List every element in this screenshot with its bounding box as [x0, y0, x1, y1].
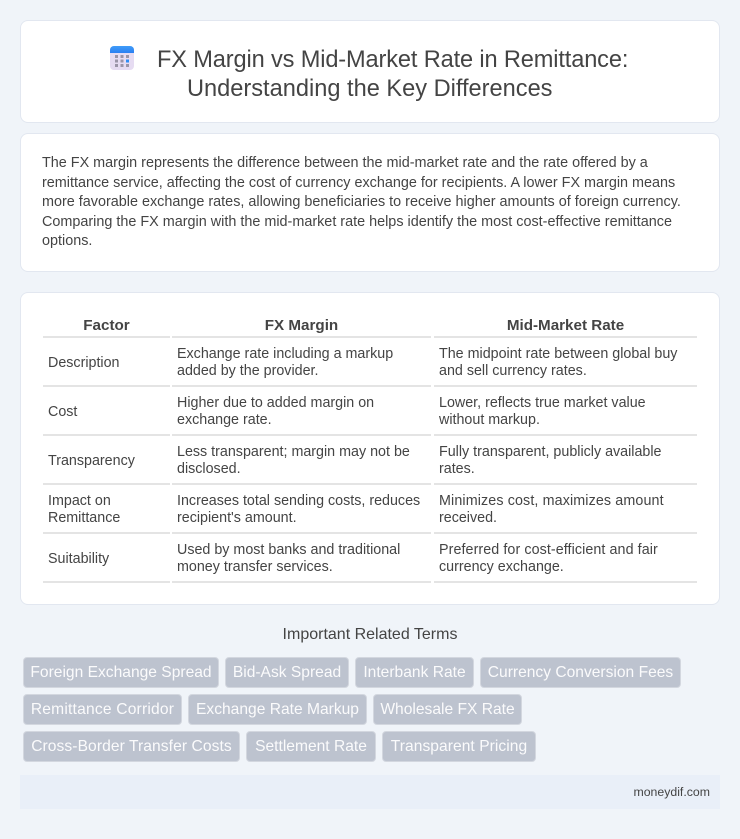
intro paragraph: options. [42, 233, 92, 249]
column headers [83, 317, 624, 334]
tag: Interbank Rate [363, 664, 466, 681]
row: impact on remittance: Impact on [48, 493, 111, 509]
tag: Bid-Ask Spread [233, 664, 341, 681]
row: description: Description [48, 355, 120, 371]
column headers: FX Margin [265, 317, 338, 334]
row: description: Exchange rate including a markup [177, 346, 393, 362]
tag [355, 657, 474, 688]
row: impact on remittance [48, 493, 664, 526]
title: FX Margin vs Mid-Market Rate in Remittance: [157, 47, 628, 73]
intro paragraph: remittance service, affecting the cost of currency exchange for recipients. A lower FX margin means [42, 174, 675, 190]
title: Understanding the Key Differences [187, 76, 552, 102]
panel: intro text [20, 133, 720, 272]
tag [373, 694, 522, 725]
tag [23, 694, 182, 725]
tag [480, 657, 681, 688]
column headers: Factor [83, 317, 130, 334]
row: impact on remittance: Remittance [48, 510, 120, 526]
row: cost: Cost [48, 404, 77, 420]
row: transparency: rates. [439, 460, 475, 476]
icon: calendar [110, 46, 134, 70]
intro paragraph: Comparing the FX margin with the mid-market rate helps identify the most cost-effective remittance [42, 214, 672, 230]
tag: Remittance Corridor [31, 701, 174, 718]
row: cost [48, 395, 646, 428]
tag: Exchange Rate Markup [196, 701, 359, 718]
row: suitability: currency exchange. [439, 558, 564, 574]
row: transparency: Less transparent; margin may not be [177, 444, 410, 460]
row: transparency: disclosed. [177, 460, 241, 476]
row: suitability: money transfer services. [177, 558, 333, 574]
row: suitability: Suitability [48, 551, 109, 567]
tag [23, 731, 240, 762]
tag: Foreign Exchange Spread [30, 664, 212, 681]
row: transparency: Fully transparent, publicly available [439, 444, 662, 460]
footer bar [20, 775, 720, 809]
row: cost: Lower, reflects true market value [439, 395, 646, 411]
tag [382, 731, 536, 762]
intro paragraph: The FX margin represents the difference between the mid-market rate and the rate offered by a [42, 155, 648, 171]
row: impact on remittance: recipient's amount. [177, 510, 297, 526]
row: cost: exchange rate. [177, 412, 272, 428]
tag: Wholesale FX Rate [380, 701, 515, 718]
row: description: added by the provider. [177, 362, 318, 378]
panel: comparison table [20, 292, 720, 605]
row: cost: Higher due to added margin on [177, 395, 374, 411]
row: impact on remittance: Minimizes cost, maximizes amount [439, 493, 664, 509]
row: transparency [48, 444, 662, 476]
tag: Cross-Border Transfer Costs [31, 738, 232, 755]
intro paragraph: more favorable exchange rates, allowing beneficiaries to receive higher amounts of foreign currency. [42, 194, 681, 210]
tag [188, 694, 367, 725]
row: transparency: Transparency [48, 453, 135, 469]
intro paragraph [42, 155, 681, 249]
row: suitability: Preferred for cost-efficient and fair [439, 542, 658, 558]
tag [225, 657, 349, 688]
row: impact on remittance: received. [439, 510, 497, 526]
row: suitability: Used by most banks and traditional [177, 542, 400, 558]
tag: Settlement Rate [255, 738, 367, 755]
row: description: The midpoint rate between global buy [439, 346, 677, 362]
tag [246, 731, 376, 762]
row: description [48, 346, 678, 378]
column headers: Mid-Market Rate [507, 317, 624, 334]
tag [23, 657, 219, 688]
footer source: moneydif.com [633, 785, 710, 799]
comparison table [43, 317, 697, 583]
tag: Transparent Pricing [391, 738, 527, 755]
row: impact on remittance: Increases total sending costs, reduces [177, 493, 420, 509]
panel: title card [20, 20, 720, 123]
row: suitability [48, 542, 658, 574]
row: description: and sell currency rates. [439, 362, 587, 378]
related terms tags [23, 657, 681, 762]
tag: Currency Conversion Fees [488, 664, 673, 681]
row: cost: without markup. [439, 412, 540, 428]
title [157, 47, 628, 102]
heading: important related terms: Important Related Terms [283, 626, 457, 643]
